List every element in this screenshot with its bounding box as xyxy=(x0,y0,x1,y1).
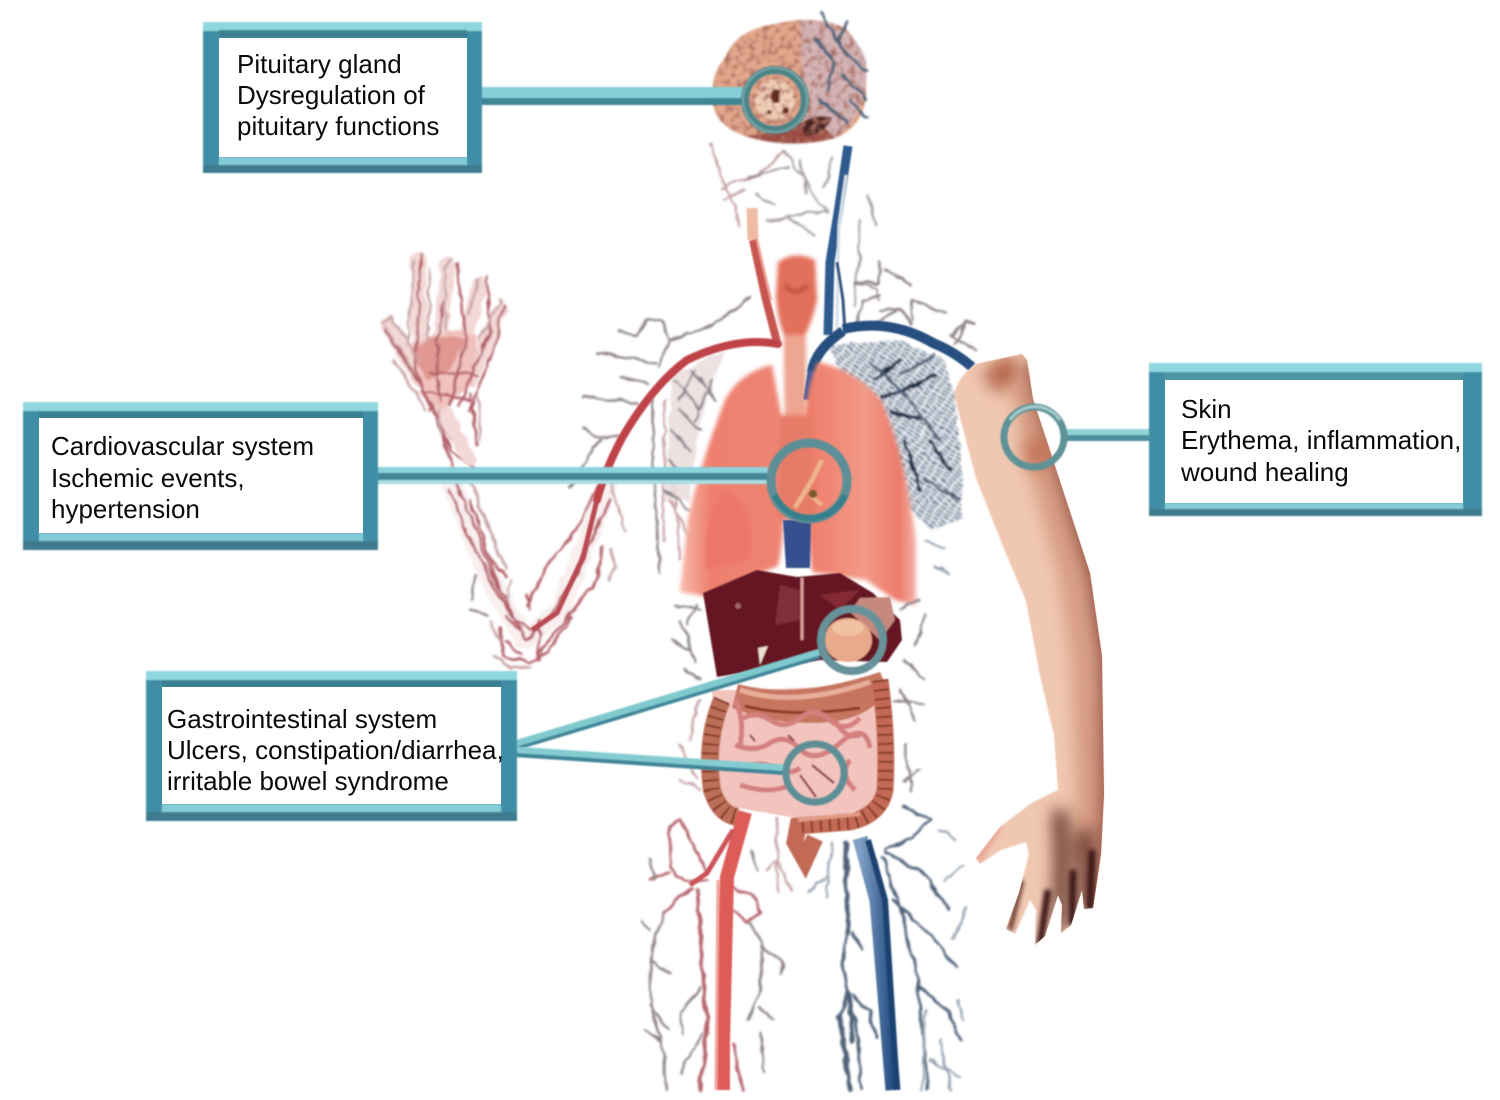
callout: gastrointestinal system: Ulcers, constipation/diarrhea, xyxy=(167,735,504,765)
callout: cardiovascular system: Cardiovascular system xyxy=(51,431,314,461)
ring: intestine xyxy=(786,744,844,802)
femoral artery xyxy=(642,817,790,1090)
ring: stomach xyxy=(821,609,883,671)
neck vessels xyxy=(712,143,877,305)
ring: cardiovascular xyxy=(771,443,847,519)
left-arm arteries xyxy=(433,297,750,668)
connector: gastrointestinal lower xyxy=(515,750,784,773)
connector: gastrointestinal upper xyxy=(515,652,820,749)
callout: skin xyxy=(1149,363,1482,516)
callout: pituitary gland: Pituitary gland xyxy=(237,49,402,79)
callout: pituitary gland: Dysregulation of xyxy=(237,80,426,110)
ring: pituitary xyxy=(743,68,807,132)
femoral vein xyxy=(810,807,967,1090)
callout: cardiovascular system: Ischemic events, xyxy=(51,463,245,493)
heart vessels in ring xyxy=(795,460,822,508)
raised hand xyxy=(382,255,503,460)
callout: gastrointestinal system: Gastrointestinal system xyxy=(167,704,437,734)
callout: gastrointestinal system xyxy=(146,671,517,821)
connector: skin xyxy=(1064,429,1152,441)
callout: gastrointestinal system: irritable bowel syndrome xyxy=(167,766,449,796)
intestines xyxy=(710,672,890,860)
vena cava xyxy=(783,520,811,568)
connector: cardiovascular xyxy=(376,467,768,484)
right arm xyxy=(954,354,1110,945)
callout: skin: Erythema, inflammation, xyxy=(1181,425,1461,455)
callout: skin: wound healing xyxy=(1180,457,1349,487)
larynx and trachea xyxy=(776,255,817,440)
callout: skin: Skin xyxy=(1181,394,1232,424)
liver and stomach xyxy=(703,570,902,677)
callout: pituitary gland: pituitary functions xyxy=(237,111,439,141)
callout: cardiovascular system xyxy=(23,402,378,550)
body illustration xyxy=(382,14,1110,1090)
pale abdominal vessels xyxy=(672,600,925,790)
ring: skin xyxy=(1004,407,1064,467)
right-side vein tree xyxy=(830,262,975,575)
callout: cardiovascular system: hypertension xyxy=(51,494,200,524)
lungs xyxy=(680,362,916,605)
callout: pituitary gland xyxy=(203,22,482,173)
brain xyxy=(712,14,868,144)
connector: pituitary xyxy=(480,87,746,105)
